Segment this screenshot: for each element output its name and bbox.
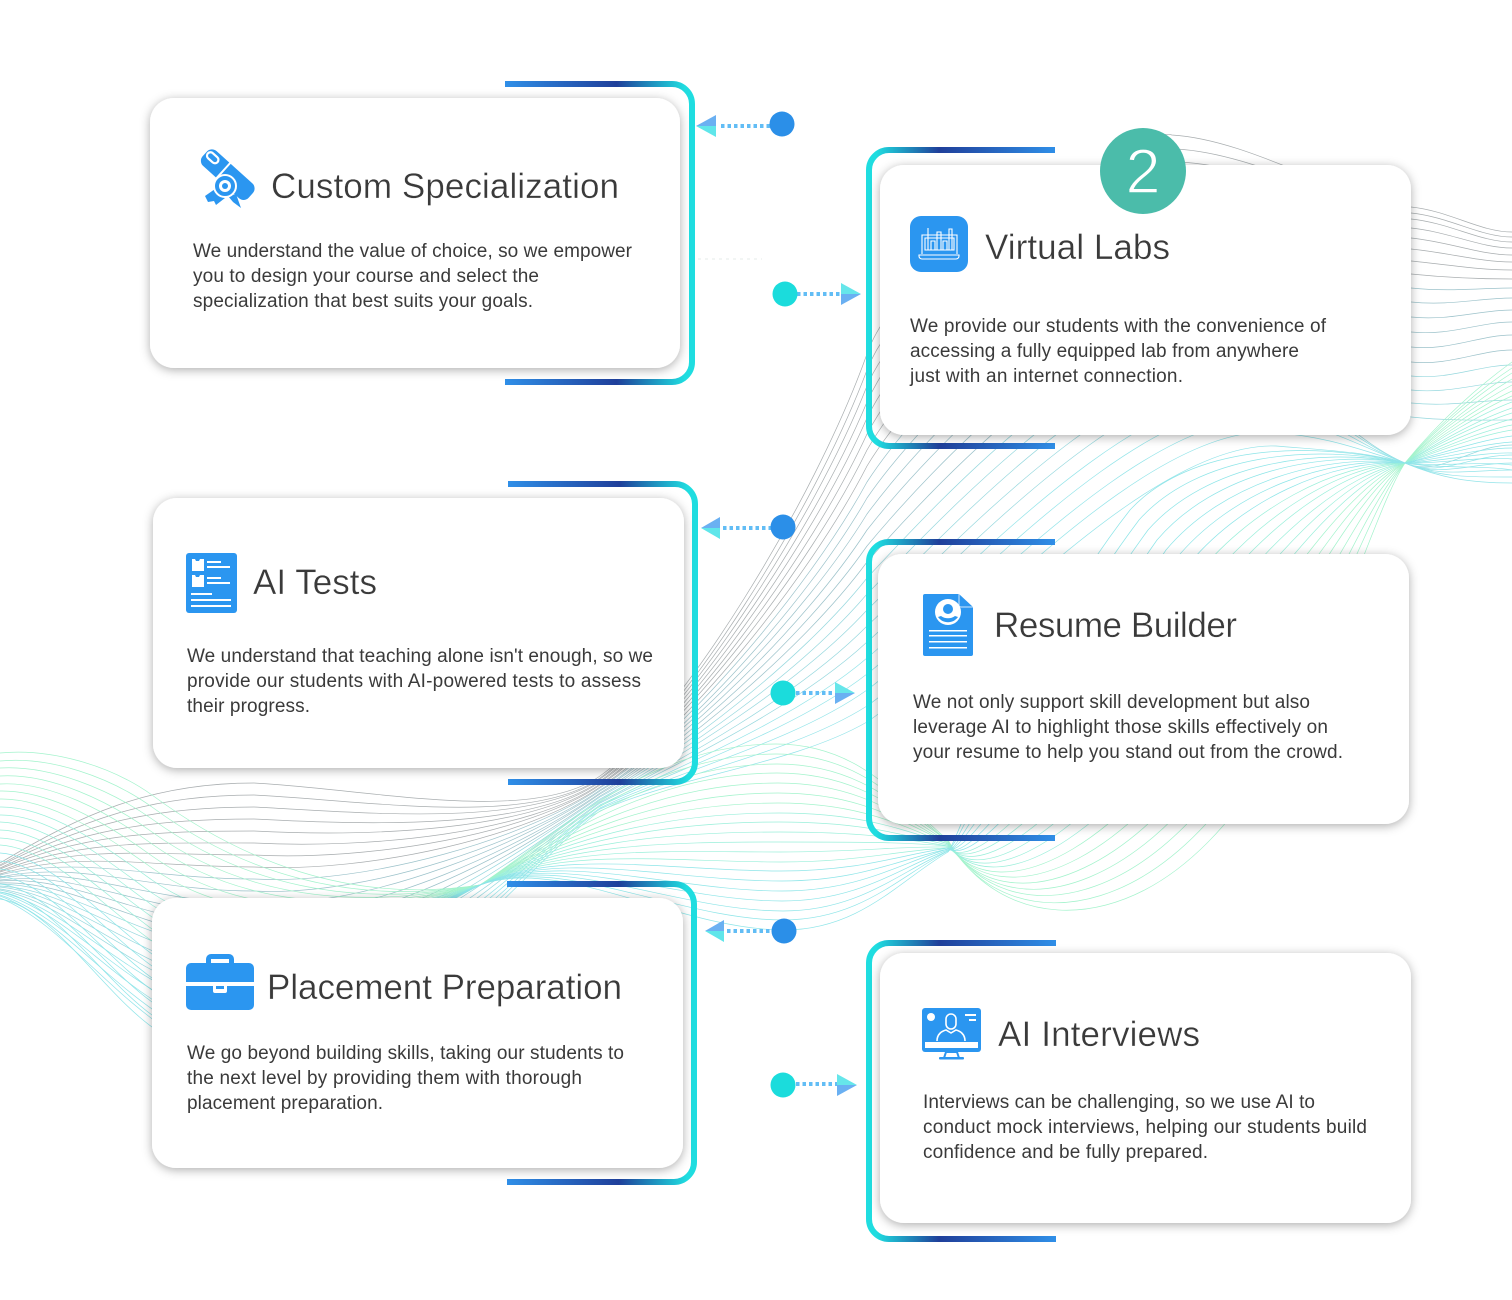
number badge [1100,128,1186,214]
card frame bracket [507,884,694,1182]
icon: diploma scroll [197,145,259,208]
body text [193,241,633,312]
body text: their progress. [187,696,310,717]
arrow: to ai tests [701,514,796,540]
body text: We provide our students with the convenience of [910,316,1327,337]
arrow: to virtual labs [772,282,861,306]
body text: We understand that teaching alone isn't enough, so we [187,646,653,667]
card frame bracket [508,484,695,782]
body text: conduct mock interviews, helping our students build [923,1117,1367,1138]
panel: ai tests [153,484,695,782]
body text: the next level by providing them with thorough [187,1068,582,1089]
card [878,554,1409,824]
body text [187,646,653,717]
card [152,898,683,1168]
icon: laptop with bar chart [910,216,968,272]
body text: We go beyond building skills, taking our students to [187,1043,624,1064]
body text: placement preparation. [187,1093,383,1114]
body text: you to design your course and select the [193,266,539,287]
body text: We not only support skill development but also [913,692,1310,713]
body text: Interviews can be challenging, so we use AI to [923,1092,1315,1113]
number badge: 2 [1125,137,1161,207]
card [880,165,1411,435]
card [150,98,680,368]
card [153,498,684,768]
panel: custom specialization [150,84,692,382]
body text: provide our students with AI-powered tests to assess [187,671,641,692]
background wave lines [0,134,1512,1059]
panel: virtual labs [869,150,1411,446]
body text: accessing a fully equipped lab from anywhere [910,341,1299,362]
icon: test sheet [186,553,237,613]
card frame bracket [869,943,1056,1239]
body text [909,316,1327,387]
panel: ai interviews [869,943,1411,1239]
body text [913,692,1343,763]
heading: AI Tests [253,563,377,602]
panel: placement preparation [152,884,694,1182]
heading: Virtual Labs [985,228,1170,267]
body text: leverage AI to highlight those skills effectively on [913,717,1328,738]
heading: AI Interviews [998,1015,1200,1054]
body text: just with an internet connection. [909,366,1183,387]
heading: Custom Specialization [271,167,619,206]
body text [923,1092,1367,1163]
body text: We understand the value of choice, so we empower [193,241,633,262]
arrow: to ai interviews [770,1072,857,1098]
arrow: to custom specialization [696,112,794,137]
card frame bracket [505,84,692,382]
body text [187,1043,624,1114]
icon: monitor with interviewee [922,1008,981,1060]
icon: briefcase [186,954,254,1010]
faint dotted guide [698,258,762,260]
card frame bracket [869,542,1055,838]
body text: confidence and be fully prepared. [923,1142,1208,1163]
arrow: to placement preparation [705,918,796,944]
card [880,953,1411,1223]
heading: Placement Preparation [267,968,622,1007]
arrow: to resume builder [770,680,855,706]
card frame bracket [869,150,1055,446]
body text: specialization that best suits your goals. [193,291,533,312]
body text: your resume to help you stand out from the crowd. [913,742,1343,763]
icon: resume document [923,594,973,656]
heading: Resume Builder [994,606,1237,645]
panel: resume builder [869,542,1409,838]
